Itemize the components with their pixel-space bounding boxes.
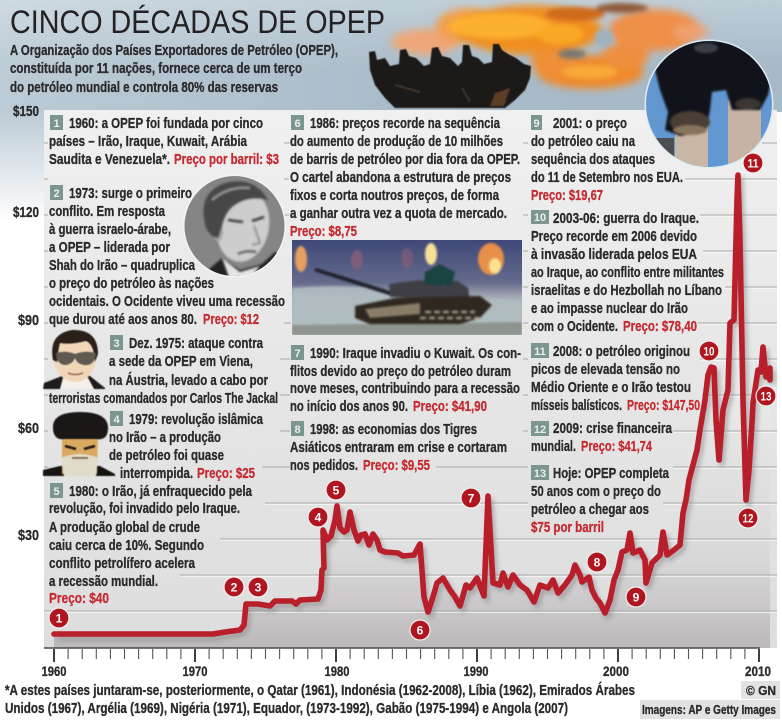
event 13 text <box>531 465 670 536</box>
event 6 text: O cartel abandona a estrutura de preços <box>290 170 511 186</box>
event 8 text: Preço: $9,55 <box>363 458 430 474</box>
event 9 text: Preço: $19,67 <box>531 188 603 204</box>
event 5 text: caiu cerca de 10%. Segundo <box>49 538 204 554</box>
event 9 text: sequência dos ataques <box>531 152 655 168</box>
credit: copyright <box>741 681 780 699</box>
event 10 text: ao Iraque, ao conflito entre militantes <box>531 265 724 281</box>
event 7 text: Preço: $41,90 <box>413 399 487 415</box>
marker 3 <box>248 577 268 597</box>
event 2 text: conflito. Em resposta <box>49 204 166 220</box>
area under price line <box>54 175 770 648</box>
event 8 text: 1998: as economias dos Tigres <box>310 422 477 438</box>
event 2 text: Preço: $12 <box>203 312 259 328</box>
marker 2: 2 <box>231 580 238 594</box>
event 4 text: de petróleo foi quase <box>109 448 224 464</box>
event 11 text: Preço: $147,50 <box>627 398 700 414</box>
number tag 1: 1 <box>53 118 60 130</box>
event 9 text: do 11 de Setembro nos EUA. <box>531 170 683 186</box>
event 4 text: 1979: revolução islâmica <box>129 412 264 428</box>
marker 4 <box>308 507 328 527</box>
credit: copyright: © GN <box>746 683 776 698</box>
event 3 text: terroristas comandados por Carlos The Jackal <box>49 391 278 407</box>
event 13 text: Hoje: OPEP completa <box>553 466 670 482</box>
event 7 text: 1990: Iraque invadiu o Kuwait. Os con- <box>310 346 521 362</box>
y axis labels: $90 <box>18 313 39 329</box>
marker 9: 9 <box>633 590 640 604</box>
number tag 10: 10 <box>534 212 546 224</box>
number tag 1 <box>50 115 63 130</box>
marker 4: 4 <box>315 510 322 524</box>
face: Carlos The Jackal <box>43 330 105 389</box>
number tag 5: 5 <box>53 486 60 498</box>
event 6 text: de barris de petróleo por dia fora da OPEP. <box>290 152 520 168</box>
event 3 text: Dez. 1975: ataque contra <box>129 336 264 352</box>
number tag 8 <box>291 421 304 436</box>
marker 12 <box>738 508 758 528</box>
y axis labels: $60 <box>18 421 39 437</box>
event 10 text: Preço: $78,40 <box>623 319 697 335</box>
event 12 text: 2009: crise financeira <box>553 421 673 437</box>
x axis with ticks: 2000 <box>603 663 629 679</box>
chart number markers <box>49 153 776 640</box>
face: Ayatollah Khomeini <box>43 412 115 476</box>
number tag 8: 8 <box>294 424 301 436</box>
event 9 text: do petróleo caiu na <box>531 134 636 150</box>
number tag 5 <box>50 483 63 498</box>
number tag 3: 3 <box>113 338 120 350</box>
number tag 4 <box>110 411 123 426</box>
event 1 text <box>49 115 279 168</box>
event 11 text: Médio Oriente e o Irão testou <box>531 380 691 396</box>
number tag 7 <box>291 345 304 360</box>
event 6 text: fixos e corta noutros preços, de forma <box>290 188 500 204</box>
grid lines <box>44 143 777 611</box>
event 12 text <box>531 421 673 455</box>
number tag 12: 12 <box>534 424 546 436</box>
event 5 text: Preço: $40 <box>49 591 109 607</box>
y axis labels: $30 <box>18 528 39 544</box>
event 5 text: 1980: o Irão, já enfraquecido pela <box>69 484 253 500</box>
event 7 text: flitos devido ao preço do petróleo duram <box>290 364 511 380</box>
event 10 text: à invasão liderada pelos EUA <box>531 247 697 263</box>
event 13 text: petróleo a chegar aos <box>531 502 649 518</box>
marker 7 <box>461 488 481 508</box>
x axis with ticks: 1990 <box>464 663 489 679</box>
event 2 text: 1973: surge o primeiro <box>69 186 192 202</box>
intro text <box>10 43 338 96</box>
event 2 text: o preço do petróleo às nações <box>49 276 214 292</box>
event 10 text: com o Ocidente. <box>531 319 618 335</box>
header background: sky <box>0 0 782 222</box>
event 12 text: Preço: $41,74 <box>581 439 652 455</box>
event 10 text: 2003-06: guerra do Iraque. <box>553 211 699 227</box>
marker 2 <box>224 577 244 597</box>
number tag 12 <box>531 421 549 436</box>
event 1 text: 1960: a OPEP foi fundada por cinco <box>69 116 263 132</box>
event 6 text: a ganhar outra vez a quota de mercado. <box>290 206 507 222</box>
event 5 text: revolução, foi invadido pelo Iraque. <box>49 501 240 517</box>
marker 5 <box>326 480 346 500</box>
x axis with ticks: 1960 <box>42 663 67 679</box>
marker 3: 3 <box>255 580 262 594</box>
footnote: *A estes países juntaram-se, posteriormente, o Qatar (1961), Indonésia (1962-2008), Líbia (1962), Emirados Árabes <box>5 682 635 699</box>
marker 5: 5 <box>333 484 340 498</box>
event 1 text: Saudita e Venezuela*. <box>49 152 170 168</box>
title: CINCO DÉCADAS DE OPEP <box>10 4 385 40</box>
marker 12: 12 <box>742 512 754 526</box>
event 11 text: 2008: o petróleo originou <box>553 344 690 360</box>
event 4 text <box>109 411 264 482</box>
number tag 4: 4 <box>113 414 120 426</box>
event 8 text: nos pedidos. <box>290 458 358 474</box>
event 2 text: que durou até aos anos 80. <box>49 312 197 328</box>
event 10 text: israelitas e do Hezbollah no Líbano <box>531 283 722 299</box>
x axis with ticks <box>42 648 771 679</box>
footnote: Unidos (1967), Argélia (1969), Nigéria (1971), Equador, (1973-1992), Gabão (1975-1994) e Angola (2007) <box>5 701 568 717</box>
number tag 6: 6 <box>294 118 301 130</box>
y axis labels <box>13 104 39 544</box>
event 13 text: 50 anos com o preço do <box>531 484 661 500</box>
event 10 text <box>531 210 724 335</box>
event 11 text: mísseis balísticos. <box>531 398 622 414</box>
x axis with ticks: 2010 <box>745 663 771 679</box>
event 9 text: 2001: o preço <box>553 116 627 132</box>
x axis with ticks: 1980 <box>324 663 350 679</box>
event 7 text: no início dos anos 90. <box>290 399 408 415</box>
event 4 text: interrompida. <box>120 466 193 482</box>
event 5 text: conflito petrolífero acelera <box>49 556 196 572</box>
event 8 text: Asiáticos entraram em crise e cortaram <box>290 440 507 456</box>
event 2 text: ocidentais. O Ocidente viveu uma recessão <box>49 294 285 310</box>
number tag 2: 2 <box>53 188 60 200</box>
event 13 text: $75 por barril <box>531 520 604 536</box>
photo: gas flare flame <box>391 3 708 89</box>
intro text: A Organização dos Países Exportadores de Petróleo (OPEP), <box>10 43 338 59</box>
photo: tank and burning oil wells <box>292 240 522 335</box>
event 2 text: Shah do Irão – quadruplica <box>49 258 196 274</box>
marker 6 <box>410 620 430 640</box>
event 11 text <box>531 343 700 414</box>
marker 6: 6 <box>417 624 424 638</box>
event 9 text <box>531 115 683 204</box>
intro text: constituída por 11 nações, fornece cerca de um terço <box>10 61 302 77</box>
footnote <box>5 682 635 717</box>
marker 11: 11 <box>748 156 759 170</box>
photo: flare stack silhouette <box>369 44 531 108</box>
photo: Shah of Iran <box>183 174 290 280</box>
marker 11 <box>743 153 763 173</box>
event 2 text: a OPEP – liderada por <box>49 240 170 256</box>
marker 13: 13 <box>760 390 772 404</box>
event 1 text: países – Irão, Iraque, Kuwait, Arábia <box>49 134 248 150</box>
number tag 13: 13 <box>534 468 546 480</box>
marker 10 <box>699 341 719 361</box>
marker 10: 10 <box>704 344 715 358</box>
event 11 text: picos de elevada tensão no <box>531 362 680 378</box>
event 6 text: 1986: preços recorde na sequência <box>310 116 501 132</box>
number tag 9 <box>531 115 542 130</box>
marker 7: 7 <box>468 492 475 506</box>
y axis labels: $150 <box>13 104 39 120</box>
number tag 7: 7 <box>294 348 301 360</box>
number tag 2 <box>50 185 63 200</box>
event 4 text: Preço: $25 <box>197 466 255 482</box>
event 7 text: nove meses, contribuindo para a recessão <box>290 381 520 397</box>
chart: oil price line <box>54 175 773 638</box>
marker 9 <box>626 587 646 607</box>
event 3 text: na Áustria, levado a cabo por <box>109 372 268 389</box>
marker 8: 8 <box>594 556 601 570</box>
event 3 text: a sede da OPEP em Viena, <box>109 354 253 370</box>
number tag 11: 11 <box>534 346 546 358</box>
event 6 text: do aumento de produção de 10 milhões <box>290 134 503 150</box>
x axis with ticks: 1970 <box>182 663 208 679</box>
event 8 text <box>290 421 507 474</box>
event 12 text: mundial. <box>531 439 576 455</box>
event 5 text: A produção global de crude <box>49 520 200 536</box>
intro text: do petróleo mundial e controla 80% das reservas <box>10 80 278 96</box>
marker 8 <box>587 552 607 572</box>
event 10 text: Preço recorde em 2006 devido <box>531 229 697 245</box>
number tag 10 <box>531 210 549 224</box>
event 5 text <box>49 483 253 607</box>
marker 1: 1 <box>56 612 63 626</box>
number tag 6 <box>291 115 304 130</box>
number tag 3 <box>110 335 123 350</box>
number tag 9: 9 <box>533 118 540 130</box>
event 5 text: a recessão mundial. <box>49 574 158 590</box>
event 6 text: Preço: $8,75 <box>290 224 357 240</box>
photo: World Trade Center attacks <box>644 40 774 170</box>
marker 1 <box>49 608 69 628</box>
event 2 text: à guerra israelo-árabe, <box>49 222 171 238</box>
event 1 text: Preço por barril: $3 <box>174 152 279 168</box>
event 2 text <box>49 185 285 328</box>
event 3 text <box>49 335 278 407</box>
number tag 11 <box>531 343 549 358</box>
panel: chart background <box>44 110 777 648</box>
event 4 text: no Irão – a produção <box>109 430 221 446</box>
event 7 text <box>290 345 521 415</box>
event 10 text: e ao impasse nuclear do Irão <box>531 301 688 317</box>
y axis labels: $120 <box>13 205 39 221</box>
event 6 text <box>290 115 520 240</box>
marker 13 <box>756 386 776 406</box>
